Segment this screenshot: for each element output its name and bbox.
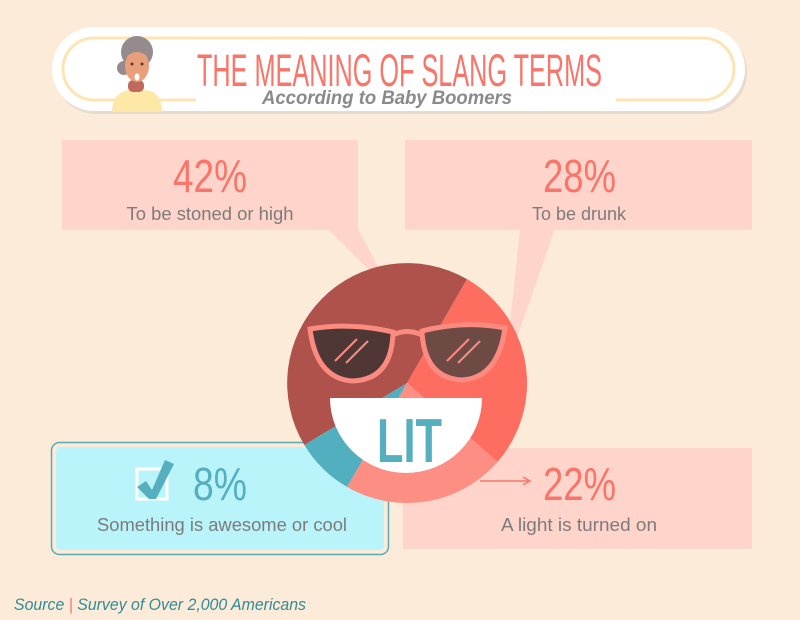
panel: 28% drunk: To be drunk — [532, 204, 627, 224]
sunglasses — [310, 325, 505, 381]
icon: checkbox — [137, 460, 174, 499]
panel: 22% light: A light is turned on — [501, 515, 657, 535]
panel: 42% stoned: 42% — [173, 150, 247, 202]
panel: 28% drunk — [405, 140, 752, 372]
LIT text: LIT — [377, 407, 442, 476]
pie chart face — [287, 263, 527, 503]
mouth — [330, 398, 482, 473]
panel: 28% drunk: 28% — [543, 150, 616, 202]
panel: 42% stoned: To be stoned or high — [126, 204, 294, 224]
panel: 8% awesome — [52, 442, 388, 554]
source: Source | Survey of Over 2,000 Americans — [14, 595, 306, 614]
panel: 22% light — [403, 448, 752, 549]
panel: 8% awesome: 8% — [193, 458, 247, 510]
panel: 42% stoned — [62, 140, 392, 293]
arrow — [480, 477, 530, 485]
subtitle: According to Baby Boomers — [261, 88, 512, 109]
icon: grandmother — [112, 36, 162, 112]
header banner — [52, 27, 747, 114]
panel: 22% light: 22% — [543, 458, 616, 510]
panel: 8% awesome: Something is awesome or cool — [97, 515, 347, 535]
